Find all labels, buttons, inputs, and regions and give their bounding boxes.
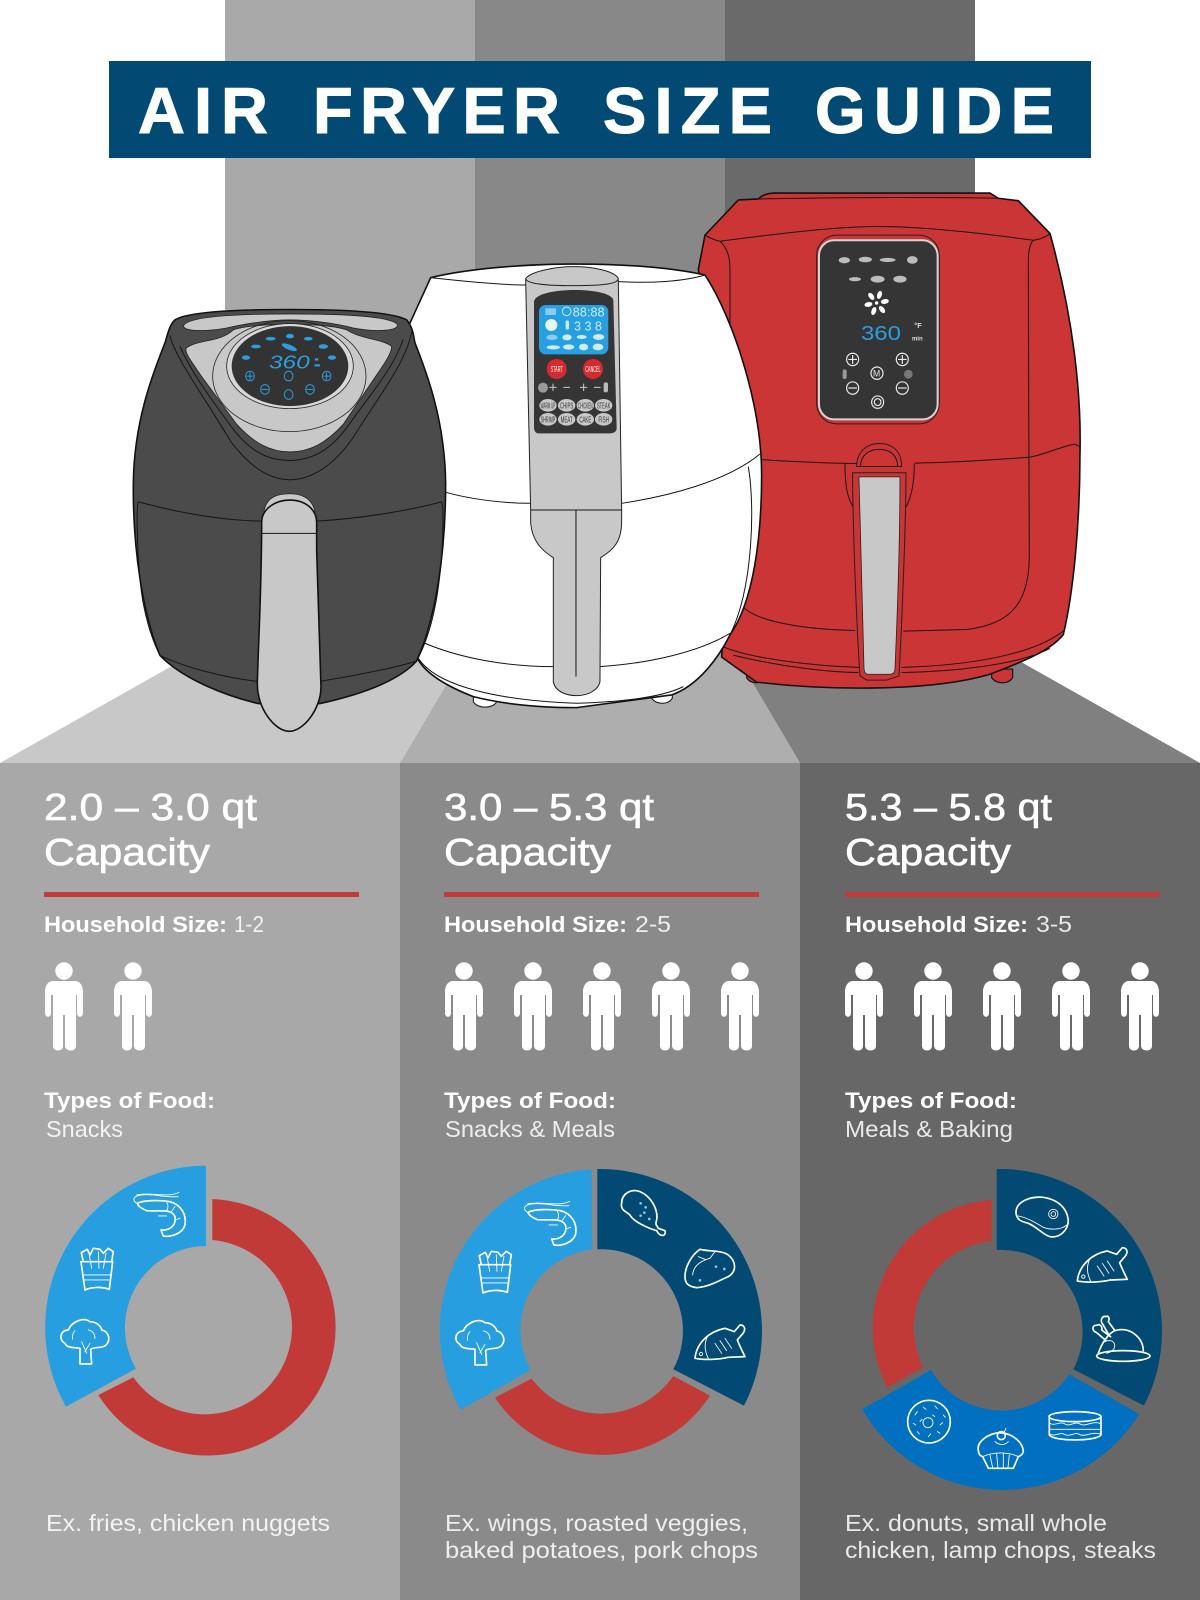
icon: steak bbox=[1016, 1197, 1068, 1237]
white fryer control panel: START bbox=[551, 365, 563, 374]
white fryer control panel: CHIPS bbox=[560, 400, 574, 410]
icon: fish chop bbox=[695, 1325, 745, 1359]
white fryer control panel: 338 bbox=[574, 319, 602, 333]
heading: small capacity: 2.0 – 3.0 qt bbox=[44, 787, 257, 829]
red fryer control panel: min bbox=[912, 335, 923, 343]
white fryer control panel: STEAK bbox=[597, 400, 611, 410]
types of food bbox=[44, 1088, 215, 1142]
black body contour lines bbox=[137, 332, 443, 681]
household size: Household Size: bbox=[845, 912, 1028, 937]
white body bbox=[393, 264, 762, 708]
donut chart: large bbox=[862, 1169, 1162, 1490]
icon: roast chicken bbox=[1093, 1316, 1150, 1361]
black fryer handle bbox=[257, 494, 321, 731]
title banner: AIR bbox=[138, 74, 268, 147]
heading: large capacity: Capacity bbox=[845, 832, 1011, 874]
black air fryer bbox=[133, 310, 446, 731]
types of food: Types of Food: bbox=[44, 1088, 215, 1113]
floor perspective bbox=[0, 636, 1200, 763]
title banner: SIZE bbox=[603, 74, 772, 147]
icon: cake bbox=[1049, 1412, 1101, 1440]
icon: shrimp bbox=[134, 1192, 185, 1236]
icon: donut bbox=[908, 1400, 950, 1443]
white fryer control panel: CAKE bbox=[579, 414, 592, 424]
household size: 3-5 bbox=[1036, 911, 1072, 937]
types of food: Meals & Baking bbox=[845, 1116, 1013, 1142]
round display bbox=[213, 321, 366, 432]
title banner: GUIDE bbox=[815, 74, 1054, 147]
red fryer handle bbox=[853, 443, 906, 680]
example foods: Ex. fries, chicken nuggets bbox=[46, 1510, 330, 1536]
icon: fries bbox=[81, 1248, 113, 1290]
silver triangular panel bbox=[186, 324, 392, 452]
round display: 360 bbox=[269, 352, 310, 373]
black body bbox=[133, 310, 446, 704]
panel: large capacity bbox=[800, 763, 1200, 1600]
types of food bbox=[444, 1088, 616, 1142]
panel: small capacity bbox=[0, 763, 400, 1600]
panel: medium capacity bbox=[400, 763, 800, 1600]
heading: large capacity: 5.3 – 5.8 qt bbox=[845, 787, 1052, 829]
top grip bbox=[183, 314, 398, 331]
red fryer control panel bbox=[817, 235, 939, 424]
white fryer control panel: WARM UP bbox=[541, 400, 555, 410]
icon: fries bbox=[479, 1251, 511, 1293]
white fryer control panel bbox=[534, 290, 617, 433]
types of food: Snacks & Meals bbox=[445, 1116, 615, 1142]
types of food: Types of Food: bbox=[444, 1088, 616, 1113]
title banner: FRYER bbox=[313, 74, 560, 147]
example foods: chicken, lamp chops, steaks bbox=[845, 1537, 1156, 1563]
white fryer control panel: 88:88 bbox=[573, 305, 605, 319]
icon: broccoli bbox=[456, 1321, 504, 1365]
example foods: Ex. wings, roasted veggies, bbox=[445, 1510, 748, 1536]
household size: 2-5 bbox=[635, 911, 671, 937]
heading: medium capacity: Capacity bbox=[444, 832, 611, 874]
household size: Household Size: bbox=[44, 912, 227, 937]
household size: 1-2 bbox=[234, 911, 264, 937]
heading: large capacity bbox=[845, 787, 1052, 874]
feet of the red fryer bbox=[747, 669, 1013, 683]
example foods bbox=[445, 1510, 758, 1563]
white fryer control panel: SHRIMP bbox=[541, 414, 556, 424]
heading: small capacity bbox=[44, 787, 257, 874]
white fryer control panel: CHICKEN bbox=[578, 400, 593, 410]
types of food: Types of Food: bbox=[845, 1088, 1017, 1113]
example foods bbox=[845, 1510, 1156, 1563]
background columns bbox=[225, 0, 975, 640]
fan icon bbox=[864, 290, 889, 316]
types of food: Snacks bbox=[46, 1116, 123, 1142]
people icons bbox=[445, 962, 759, 1050]
people icons bbox=[845, 962, 1159, 1050]
example foods: baked potatoes, pork chops bbox=[445, 1537, 758, 1563]
example foods: Ex. donuts, small whole bbox=[845, 1510, 1107, 1536]
white fryer panel and handle bbox=[526, 267, 622, 696]
red fryer control panel: °F bbox=[914, 321, 922, 330]
red body bbox=[698, 193, 1080, 688]
icon: drumstick bbox=[621, 1191, 665, 1235]
white body contour lines bbox=[418, 275, 760, 703]
people icons bbox=[45, 962, 152, 1050]
icon: potato bbox=[685, 1249, 735, 1288]
donut chart: medium bbox=[440, 1169, 762, 1455]
white fryer control panel: FISH bbox=[598, 414, 609, 424]
icon: broccoli bbox=[61, 1320, 109, 1364]
red air fryer bbox=[698, 193, 1080, 688]
icon: fish chop bbox=[1077, 1248, 1127, 1282]
heading: medium capacity: 3.0 – 5.3 qt bbox=[444, 787, 654, 829]
red fryer control panel: M bbox=[873, 369, 880, 379]
heading: medium capacity bbox=[444, 787, 654, 874]
heading: small capacity: Capacity bbox=[44, 832, 210, 874]
household size: Household Size: bbox=[444, 912, 627, 937]
donut chart: small bbox=[45, 1166, 336, 1456]
red body contour lines bbox=[705, 198, 1080, 672]
icon: cupcake bbox=[978, 1428, 1023, 1468]
white air fryer bbox=[393, 264, 762, 708]
types of food bbox=[845, 1088, 1017, 1142]
feet of the white fryer bbox=[473, 692, 672, 707]
red fryer control panel: 360 bbox=[861, 323, 901, 345]
white fryer control panel: CANCEL bbox=[585, 365, 601, 374]
white fryer control panel: MEAT bbox=[561, 414, 573, 424]
icon: shrimp bbox=[525, 1201, 576, 1245]
title banner bbox=[109, 61, 1091, 158]
